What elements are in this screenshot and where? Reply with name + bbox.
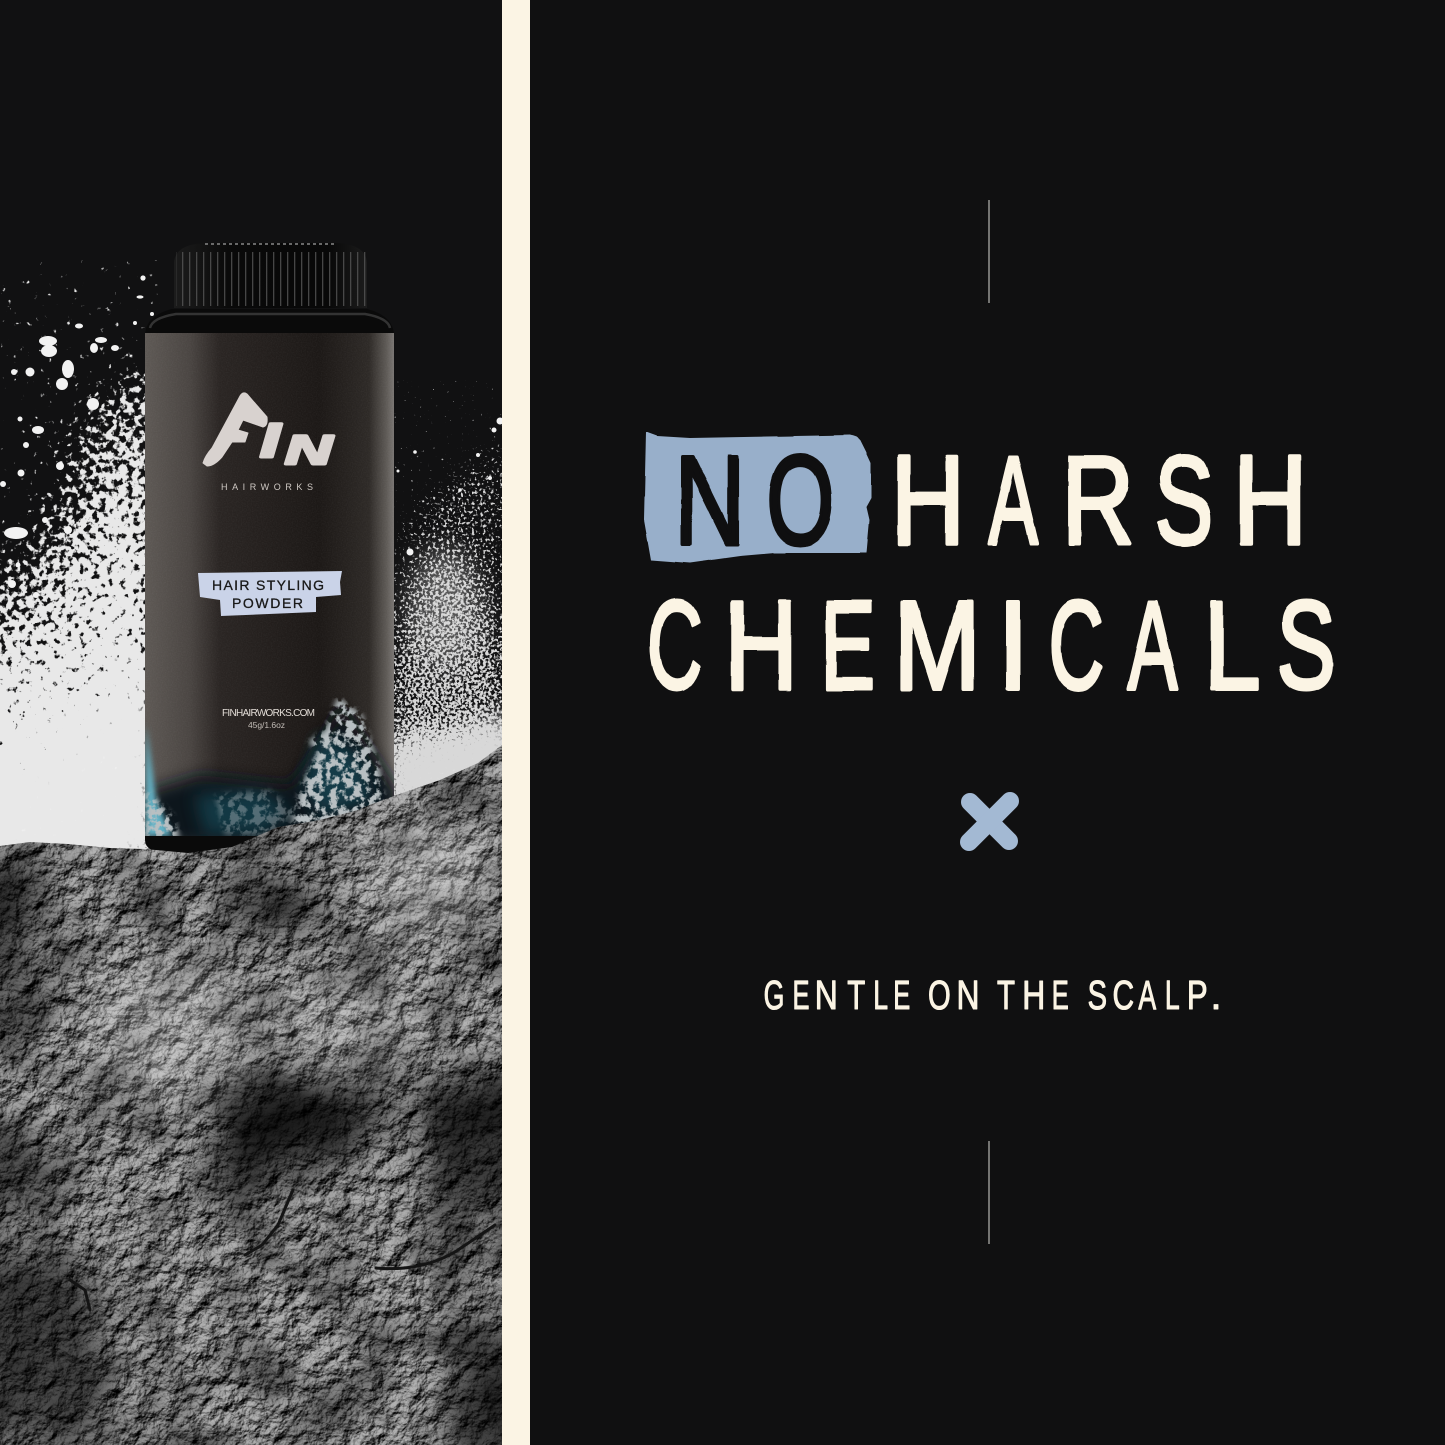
headline word: CHEMICALS: I bbox=[998, 575, 1028, 716]
logo mountain mark bbox=[203, 393, 267, 466]
subheading: E bbox=[1052, 972, 1069, 1018]
powder speckle left bbox=[0, 350, 160, 860]
bottle label bbox=[145, 333, 398, 860]
rock shading bbox=[0, 860, 540, 1445]
icon: cross bbox=[969, 801, 1010, 842]
product name tag bbox=[198, 571, 342, 616]
product name tag: HAIR STYLING bbox=[212, 577, 324, 593]
rock highlight bbox=[90, 825, 490, 1100]
headline word: HARSH: R bbox=[1062, 430, 1134, 571]
subheading: . bbox=[1210, 972, 1222, 1018]
subheading: A bbox=[1138, 972, 1157, 1018]
powder fog bbox=[0, 548, 520, 860]
headline bbox=[644, 430, 1336, 716]
headline word: CHEMICALS: A bbox=[1128, 575, 1178, 716]
highlight brush patch bbox=[644, 432, 871, 563]
cream divider stripe bbox=[502, 0, 530, 1445]
product name tag: POWDER bbox=[232, 595, 303, 611]
rock texture bbox=[0, 730, 502, 1445]
rock mottling bbox=[0, 730, 502, 1445]
logo wordmark: F bbox=[214, 435, 227, 457]
logo wordmark: N bbox=[285, 427, 334, 473]
powder flecks bbox=[0, 275, 504, 598]
rock bbox=[0, 730, 540, 1445]
subheading: O bbox=[928, 972, 951, 1018]
photo backdrop bbox=[0, 0, 502, 1445]
headline word: HARSH: H bbox=[891, 430, 965, 571]
subheading: S bbox=[1088, 972, 1107, 1018]
bottle cap bbox=[174, 243, 367, 308]
rock cracks bbox=[70, 1190, 495, 1310]
subheading: L bbox=[873, 972, 888, 1018]
headline word: NO: O bbox=[766, 430, 834, 571]
website: FINHAIRWORKS.COM bbox=[222, 708, 315, 719]
net weight: 45g/1.6oz bbox=[248, 720, 285, 730]
subheading: E bbox=[792, 972, 810, 1018]
powder speckle right bbox=[385, 440, 510, 810]
subheading: N bbox=[815, 972, 838, 1018]
headline word: CHEMICALS: L bbox=[1204, 575, 1260, 716]
headline word: CHEMICALS: M bbox=[894, 575, 980, 716]
wave artwork bbox=[145, 697, 394, 836]
headline word: CHEMICALS: C bbox=[647, 575, 703, 716]
subheading: C bbox=[1112, 972, 1134, 1018]
subheading: G bbox=[764, 972, 784, 1018]
subheading: T bbox=[997, 972, 1015, 1018]
bottle body bbox=[145, 309, 394, 853]
panel: message bbox=[644, 200, 1336, 1244]
product bottle bbox=[145, 243, 398, 860]
headline word: CHEMICALS: H bbox=[724, 575, 798, 716]
headline word: HARSH: A bbox=[988, 430, 1038, 571]
panel: product photo bbox=[0, 243, 502, 1445]
brand logo bbox=[203, 393, 334, 492]
headline word: HARSH: S bbox=[1154, 430, 1214, 571]
logo sub-brand: HAIRWORKS bbox=[221, 482, 313, 492]
headline word: CHEMICALS: S bbox=[1276, 575, 1336, 716]
subheading: L bbox=[1165, 972, 1180, 1018]
logo wordmark: I bbox=[260, 415, 282, 468]
bottom rule bbox=[988, 1141, 990, 1244]
subheading: P bbox=[1187, 972, 1208, 1018]
top rule bbox=[988, 200, 990, 303]
powder splash bbox=[0, 275, 520, 860]
headline word: NO: N bbox=[674, 430, 746, 571]
subheading: T bbox=[847, 972, 865, 1018]
headline word: HARSH: H bbox=[1233, 430, 1307, 571]
subheading: E bbox=[893, 972, 910, 1018]
headline word: CHEMICALS: E bbox=[820, 575, 876, 716]
headline word: CHEMICALS: C bbox=[1049, 575, 1104, 716]
subheading: N bbox=[956, 972, 980, 1018]
bottle shoulder highlight bbox=[150, 314, 390, 328]
subheading: H bbox=[1022, 972, 1045, 1018]
